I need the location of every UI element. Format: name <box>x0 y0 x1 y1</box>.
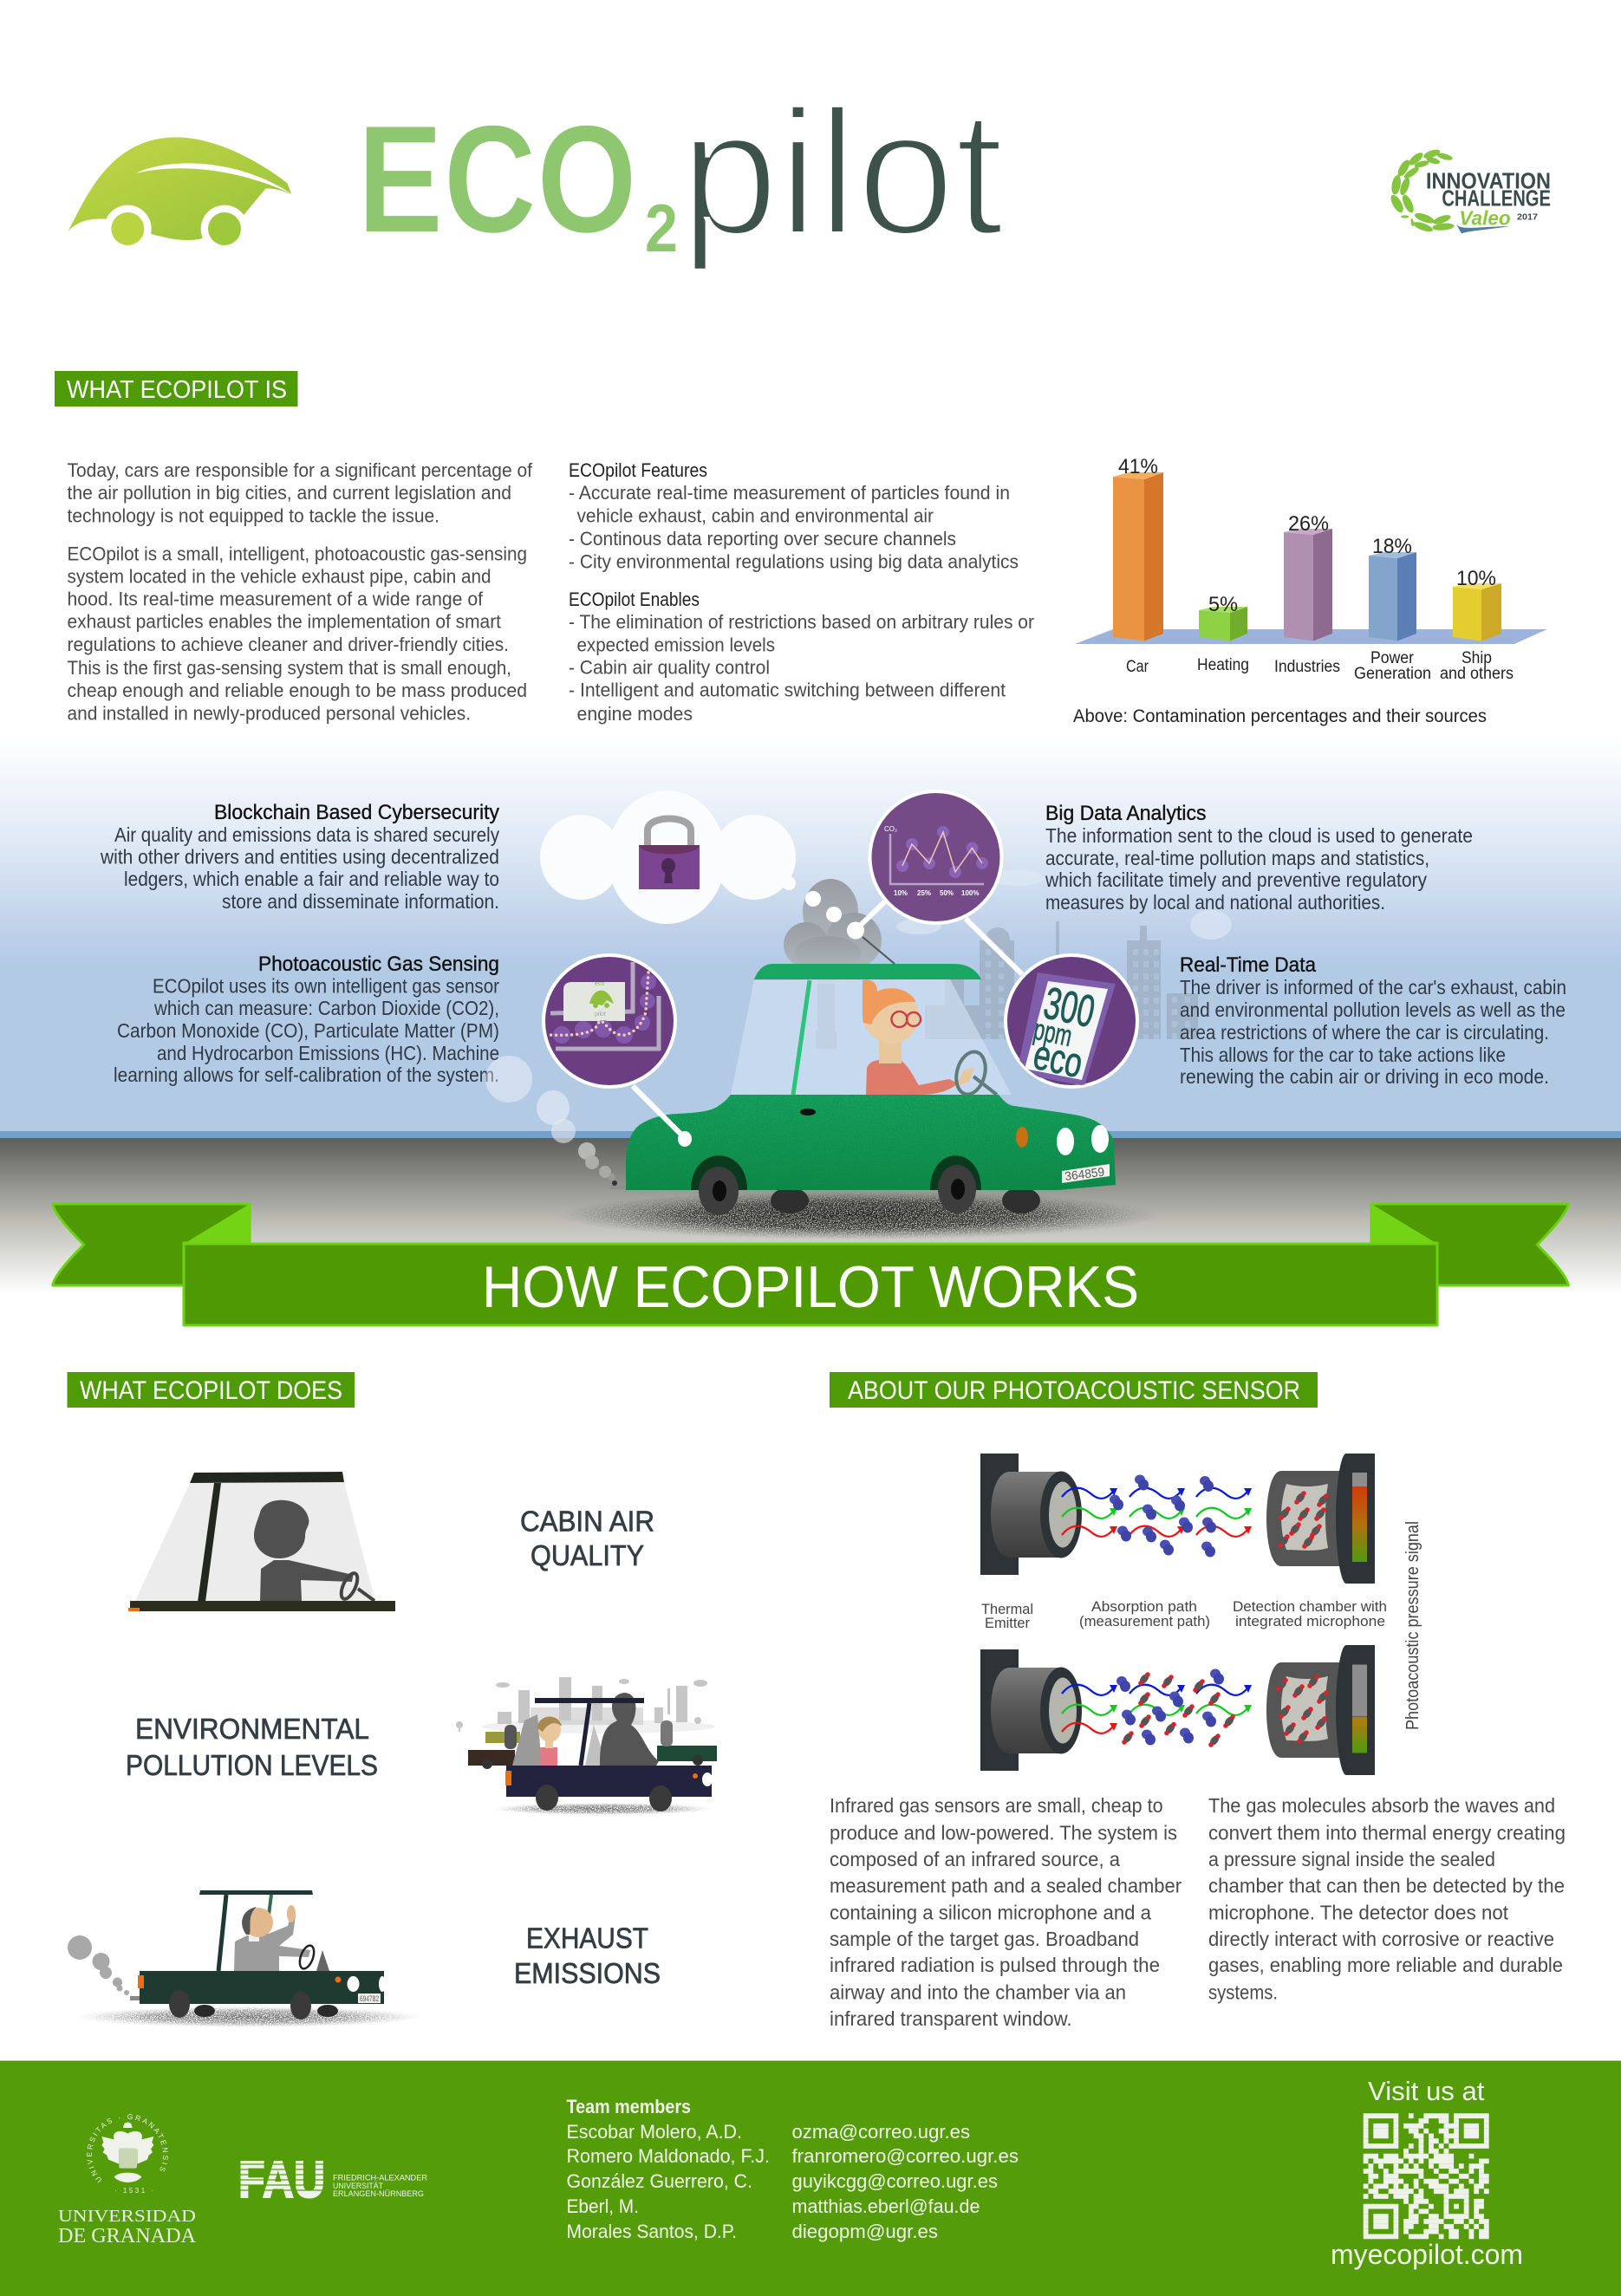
label: exhaust emissions: EXHAUST <box>526 1922 648 1954</box>
chart labels: Ship <box>1462 649 1492 667</box>
text block: photoacoustic gas sensing: Photoacoustic Gas Sensing <box>258 953 499 976</box>
text block: features and enables: engine modes <box>577 703 693 725</box>
chart labels: and others <box>1440 665 1514 683</box>
smoke cloud <box>784 879 882 971</box>
circle: ppm display: 300 <box>1039 978 1099 1037</box>
text block: gas molecules: gases, enabling more reliable and durable <box>1208 1954 1563 1976</box>
text block: intro: This is the first gas-sensing system that is small enough, <box>68 657 511 679</box>
bar: ship and others <box>1453 567 1501 641</box>
text block: gas molecules: The gas molecules absorb the waves and <box>1208 1794 1555 1817</box>
team emails: diegopm@ugr.es <box>792 2221 938 2242</box>
signal meter <box>1352 1473 1367 1562</box>
diagram: photoacoustic sensor, top row <box>980 1454 1375 1584</box>
text block: photoacoustic gas sensing: learning allows for self-calibration of the system. <box>114 1063 499 1086</box>
seat and drivers <box>512 1693 659 1766</box>
circle: ppm display <box>1004 953 1139 1089</box>
text block: blockchain cybersecurity <box>100 801 499 913</box>
bar: car <box>1113 455 1163 641</box>
circle: ppm display: ppm <box>1031 1013 1075 1053</box>
text block: intro: regulations to achieve cleaner and driver-friendly cities. <box>68 634 509 655</box>
circle: big data chart: 100% <box>961 889 979 897</box>
wave arrows <box>1062 1488 1252 1537</box>
text block: infrared sensors: containing a silicon microphone and a <box>830 1902 1151 1924</box>
text block: big data analytics: The information sent to the cloud is used to generate <box>1045 824 1473 847</box>
text block: features and enables: vehicle exhaust, cabin and environmental air <box>577 504 934 527</box>
diagram labels: integrated microphone <box>1235 1613 1385 1629</box>
label: cabin air quality <box>520 1505 654 1571</box>
text block: big data analytics: which facilitate timely and preventive regulatory <box>1045 868 1427 891</box>
footer background <box>0 2061 1621 2296</box>
callout lines <box>633 901 1022 1138</box>
logo: leaf car <box>68 137 292 252</box>
ground shadow <box>559 1191 1157 1239</box>
text block: blockchain cybersecurity: Blockchain Based Cybersecurity <box>214 801 499 824</box>
banner: right tail <box>1371 1204 1568 1285</box>
text block: infrared sensors: infrared transparent window. <box>830 2007 1072 2030</box>
label: environmental pollution levels: ENVIRONMENTAL <box>135 1713 369 1745</box>
text block: gas molecules: systems. <box>1208 1981 1278 2004</box>
illustration: traffic in city <box>456 1677 717 1815</box>
logo: innovation challenge: CHALLENGE <box>1442 185 1551 211</box>
team emails: matthias.eberl@fau.de <box>792 2195 980 2217</box>
team emails: franromero@correo.ugr.es <box>792 2145 1019 2167</box>
text block: big data analytics: measures by local and national authorities. <box>1045 891 1385 914</box>
banner: right fold <box>1371 1204 1437 1244</box>
label: environmental pollution levels: POLLUTION LEVELS <box>126 1749 378 1781</box>
text block: infrared sensors: infrared radiation is pulsed through the <box>830 1954 1160 1976</box>
logo: universidad de granada: UNIVERSIDAD <box>58 2207 196 2226</box>
text block: infrared sensors: airway and into the chamber via an <box>830 1981 1126 2004</box>
driver <box>234 1905 310 1971</box>
chamber window <box>1281 1676 1328 1741</box>
seal: · 1531 · <box>114 2187 156 2195</box>
bar: heating: 5% <box>1208 593 1238 616</box>
wheel arches <box>691 1155 981 1190</box>
heading: what ecopilot is: WHAT ECOPILOT IS <box>67 376 287 404</box>
text block: gas molecules: convert them into thermal energy creating <box>1208 1821 1566 1844</box>
text block: features and enables: - Accurate real-time measurement of particles found in <box>569 482 1010 504</box>
text block: photoacoustic gas sensing: which can measure: Carbon Dioxide (CO2), <box>153 997 499 1019</box>
team emails <box>792 2121 1019 2242</box>
callout line to roof <box>863 937 895 964</box>
text block: real-time data: area restrictions of where the car is circulating. <box>1180 1021 1549 1044</box>
text block: gas molecules: a pressure signal inside the sealed <box>1208 1848 1495 1870</box>
text block: intro: cheap enough and reliable enough to be mass produced <box>68 680 527 701</box>
icon: padlock <box>639 818 700 889</box>
text block: intro: the air pollution in big cities, and current legislation and <box>68 482 511 504</box>
bar chart: contamination sources <box>1075 455 1547 683</box>
text block: features and enables: - City environmental regulations using big data analytics <box>569 551 1019 572</box>
text block: real-time data: and environmental pollution levels as well as the <box>1180 998 1566 1021</box>
car <box>610 964 1116 1215</box>
logo: universidad de granada <box>58 2114 197 2247</box>
circle: big data chart: 25% <box>917 889 931 897</box>
car body <box>140 1971 384 2004</box>
smoke dots <box>805 891 842 922</box>
text block: intro: technology is not equipped to tackle the issue. <box>68 504 439 527</box>
website: myecopilot.com <box>1331 2239 1523 2270</box>
windshield <box>731 979 1012 1095</box>
team members <box>567 2096 770 2242</box>
faint clouds <box>896 870 1232 940</box>
illustration: cabin <box>128 1472 395 1611</box>
circle: ppm display: eco <box>1030 1032 1086 1087</box>
text block: big data analytics <box>1045 802 1473 914</box>
banner: left fold <box>184 1204 250 1244</box>
exhaust puffs <box>485 1056 617 1186</box>
text block: big data analytics: Big Data Analytics <box>1045 802 1207 825</box>
text block: blockchain cybersecurity: ledgers, which enable a fair and reliable way to <box>124 868 499 890</box>
text block: features and enables: - Cabin air quality control <box>569 657 770 678</box>
title: ECO2pilot: pilot <box>680 73 1004 272</box>
text block: photoacoustic gas sensing <box>114 953 499 1086</box>
circle: big data chart: 50% <box>940 889 954 897</box>
pillar <box>793 980 810 1095</box>
text block: features and enables: ECOpilot Features <box>569 459 707 481</box>
text block: blockchain cybersecurity: Air quality and emissions data is shared securely <box>114 823 499 846</box>
text block: intro: Today, cars are responsible for a significant percentage of <box>68 459 533 481</box>
bar: car: 41% <box>1118 455 1158 478</box>
text block: features and enables: - Intelligent and automatic switching between different <box>569 680 1006 700</box>
text block: blockchain cybersecurity: store and disseminate information. <box>222 890 499 913</box>
circle: big data chart: 10% <box>894 889 908 897</box>
license plate: 364859 <box>1064 1164 1105 1183</box>
chart labels: Industries <box>1274 658 1340 676</box>
logo: innovation challenge <box>1389 147 1551 234</box>
steering wheel <box>297 1943 316 1971</box>
rear lower wheels <box>771 1187 1040 1213</box>
chart labels: Power <box>1370 649 1415 667</box>
logo: innovation challenge: INNOVATION <box>1426 167 1551 193</box>
text block: real-time data: Real-Time Data <box>1180 953 1317 977</box>
diagram labels: Absorption path <box>1091 1598 1197 1615</box>
text block: intro: exhaust particles enables the implementation of smart <box>68 610 501 633</box>
label: exhaust emissions <box>514 1922 661 1989</box>
illustration: exhaust car <box>68 1890 422 2027</box>
driver silhouette <box>254 1500 354 1601</box>
body <box>626 1095 1116 1190</box>
label: photoacoustic pressure signal: Photoacoustic pressure signal <box>1403 1521 1422 1730</box>
text block: features and enables: - The elimination of restrictions based on arbitrary rules or <box>569 611 1034 633</box>
label: exhaust emissions: EMISSIONS <box>514 1957 661 1989</box>
banner: left tail <box>53 1204 250 1285</box>
text block: real-time data: This allows for the car to take actions like <box>1180 1044 1506 1066</box>
text block: intro: and installed in newly-produced personal vehicles. <box>68 702 471 725</box>
text block: gas molecules <box>1208 1794 1566 2004</box>
text block: real-time data <box>1180 953 1566 1088</box>
city skyline <box>816 921 1198 1049</box>
exhaust pipe <box>610 1185 628 1189</box>
driver <box>863 980 974 1095</box>
text block: infrared sensors: Infrared gas sensors are small, cheap to <box>830 1794 1163 1817</box>
text block: infrared sensors: produce and low-powered. The system is <box>830 1821 1177 1844</box>
text block: photoacoustic gas sensing: and Hydrocarbon Emissions (HC). Machine <box>157 1042 499 1064</box>
logo: FAU: ERLANGEN-NÜRNBERG <box>333 2189 424 2198</box>
text block: features and enables <box>569 459 1034 725</box>
icon: small eco leaf <box>589 981 614 1018</box>
label: environmental pollution levels <box>126 1713 378 1781</box>
text block: real-time data: The driver is informed of the car's exhaust, cabin <box>1180 976 1566 998</box>
text block: intro: ECOpilot is a small, intelligent, photoacoustic gas-sensing <box>68 543 527 565</box>
sky background <box>0 737 1621 1131</box>
text block: gas molecules: directly interact with corrosive or reactive <box>1208 1928 1554 1950</box>
bar: power generation: 18% <box>1372 535 1412 558</box>
logo: FAU: FRIEDRICH-ALEXANDER <box>333 2174 428 2182</box>
building windows <box>988 949 1188 1039</box>
diagram labels: Detection chamber with <box>1233 1598 1387 1615</box>
team emails: guyikcgg@correo.ugr.es <box>792 2170 998 2192</box>
car body <box>506 1766 712 1797</box>
illustration: exhaust car: 694782 <box>360 1994 379 2003</box>
text block: photoacoustic gas sensing: Carbon Monoxide (CO), Particulate Matter (PM) <box>117 1019 499 1042</box>
text block: gas molecules: chamber that can then be detected by the <box>1208 1875 1565 1897</box>
bar: ship and others: 10% <box>1456 567 1496 590</box>
team members: Escobar Molero, A.D. <box>567 2121 742 2143</box>
text block: infrared sensors <box>830 1794 1182 2030</box>
roof <box>754 964 981 979</box>
callout dots <box>678 922 864 1147</box>
circle: sensor <box>542 953 677 1089</box>
chart labels <box>1126 649 1514 683</box>
text block: features and enables: - Continous data reporting over secure channels <box>569 528 956 550</box>
text block: features and enables: ECOpilot Enables <box>569 589 700 610</box>
heading: what ecopilot does: WHAT ECOPILOT DOES <box>80 1376 342 1405</box>
diagram labels: (measurement path) <box>1079 1613 1210 1629</box>
bar: power generation <box>1369 535 1416 641</box>
text block: blockchain cybersecurity: with other drivers and entities using decentralized <box>100 846 499 868</box>
team members: Eberl, M. <box>567 2195 639 2217</box>
logo: universidad de granada: DE GRANADA <box>58 2225 197 2247</box>
team members: González Guerrero, C. <box>567 2170 752 2192</box>
seal: UNIVERSITAS · GRANATENSIS <box>87 2114 168 2182</box>
city skyline <box>481 1720 715 1733</box>
text block: gas molecules: microphone. The detector does not <box>1208 1902 1509 1924</box>
icon: small eco leaf: pilot <box>595 1011 606 1018</box>
road <box>0 1138 1621 1294</box>
cloud with padlock <box>540 790 796 924</box>
diagram labels: Thermal <box>981 1601 1033 1617</box>
signal meter <box>1352 1664 1367 1753</box>
lights <box>1016 1125 1109 1155</box>
diagram: photoacoustic sensor, bottom row <box>980 1645 1375 1775</box>
visit us: Visit us at <box>1368 2076 1485 2106</box>
bar: heating <box>1199 593 1247 641</box>
chart labels: Car <box>1126 658 1149 676</box>
chart labels: Heating <box>1197 656 1249 674</box>
chamber window <box>1281 1484 1328 1551</box>
wave arrows <box>1062 1685 1252 1733</box>
team emails: ozma@correo.ugr.es <box>792 2121 970 2143</box>
door handle <box>800 1109 816 1115</box>
label: cabin air quality: QUALITY <box>531 1539 644 1571</box>
banner: how ecopilot works: HOW ECOPILOT WORKS <box>482 1254 1139 1320</box>
logo: FAU: UNIVERSITÄT <box>333 2182 383 2190</box>
logo: FAU: FAU <box>238 2151 325 2208</box>
team members: Morales Santos, D.P. <box>567 2221 737 2242</box>
text block: real-time data: renewing the cabin air or driving in eco mode. <box>1180 1065 1549 1088</box>
horizon band <box>0 1131 1621 1138</box>
wheels <box>699 1165 976 1215</box>
text block: infrared sensors: sample of the target gas. Broadband <box>830 1928 1139 1950</box>
chart labels: Generation <box>1354 665 1431 683</box>
circle: big data chart: CO₂ <box>884 825 897 833</box>
smoke puffs <box>68 1935 129 1995</box>
bar: industries: 26% <box>1288 512 1329 536</box>
QR code <box>1364 2116 1489 2236</box>
chart caption: Above: Contamination percentages and their sources <box>1073 706 1487 726</box>
roof and pillar <box>535 1698 644 1766</box>
steering wheel <box>952 1049 997 1097</box>
logo: innovation challenge: 2017 <box>1517 212 1538 222</box>
team members: Team members <box>567 2096 691 2117</box>
label: cabin air quality: CABIN AIR <box>520 1505 654 1538</box>
diagram labels <box>981 1598 1387 1631</box>
banner: how ecopilot works <box>184 1244 1437 1325</box>
text block: intro <box>68 459 533 725</box>
gas molecules <box>1116 1669 1329 1747</box>
title: ECO2pilot: 2 <box>645 190 678 266</box>
team members: Romero Maldonado, F.J. <box>567 2145 770 2167</box>
body texture <box>626 1095 1116 1190</box>
title: ECO2pilot <box>357 73 1004 272</box>
background cars <box>468 1720 717 1769</box>
text block: intro: hood. Its real-time measurement of a wide range of <box>68 588 484 610</box>
text block: infrared sensors: measurement path and a sealed chamber <box>830 1875 1182 1897</box>
icon: small eco leaf: eco <box>595 981 604 987</box>
gas molecules <box>1110 1475 1329 1557</box>
text block: features and enables: expected emission levels <box>577 634 775 655</box>
diagram labels: Emitter <box>985 1615 1030 1631</box>
text block: photoacoustic gas sensing: ECOpilot uses its own intelligent gas sensor <box>153 974 499 997</box>
title: ECO2pilot: ECO <box>357 93 637 265</box>
heading: about our photoacoustic sensor: ABOUT OUR PHOTOACOUSTIC SENSOR <box>848 1376 1300 1405</box>
circle: big data chart <box>869 790 1004 925</box>
text block: big data analytics: accurate, real-time pollution maps and statistics, <box>1045 847 1429 869</box>
bar: industries <box>1284 512 1332 641</box>
text block: infrared sensors: composed of an infrared source, a <box>830 1848 1120 1870</box>
text block: intro: system located in the vehicle exhaust pipe, cabin and <box>68 565 491 588</box>
logo: innovation challenge: Valeo <box>1459 206 1511 229</box>
logo: FAU <box>234 2151 428 2208</box>
roof and pillars <box>199 1890 313 1971</box>
